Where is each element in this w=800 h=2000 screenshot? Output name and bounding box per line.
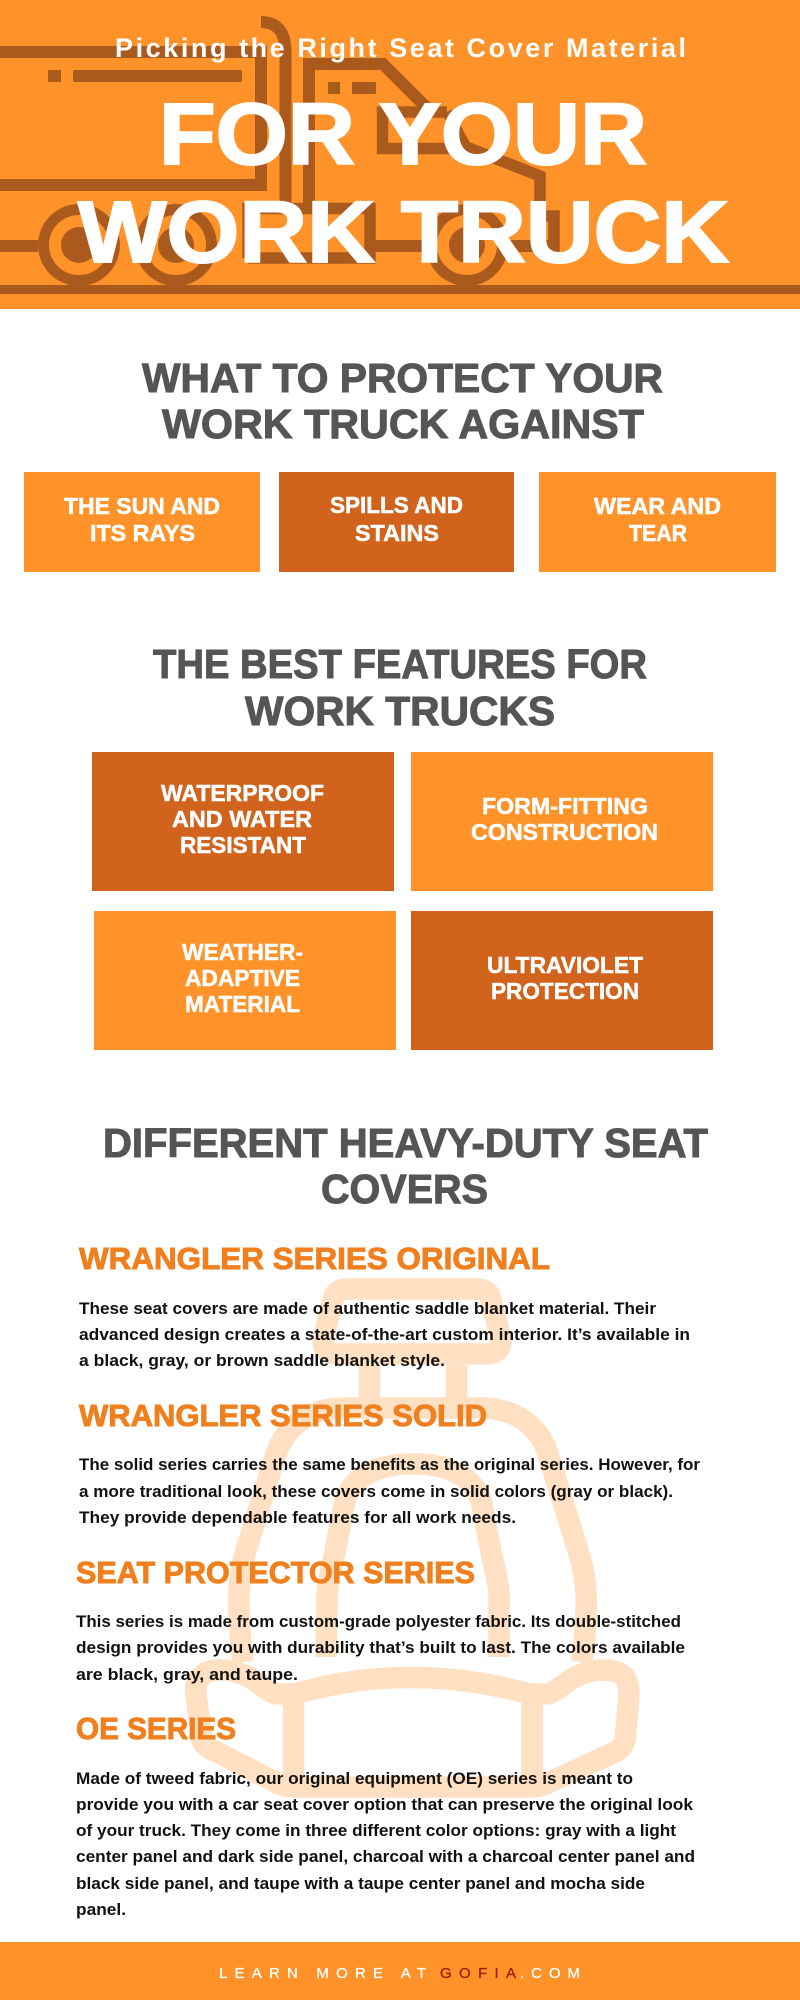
icon: truck outline <box>0 22 800 294</box>
section body <box>76 1612 685 1684</box>
card: the sun and its rays <box>24 472 260 572</box>
section body: They provide dependable features for all work needs. <box>79 1508 516 1527</box>
section body: advanced design creates a state-of-the-art custom interior. It’s available in <box>79 1325 690 1344</box>
card: spills and stains: STAINS <box>355 520 439 546</box>
icon: car seat watermark <box>196 1289 629 1790</box>
card: weather-adaptive: WEATHER- <box>182 939 303 965</box>
card: waterproof: RESISTANT <box>180 832 306 858</box>
card: the sun and its rays: THE SUN AND <box>64 493 220 519</box>
title: FOR YOUR <box>159 86 647 183</box>
card: spills and stains: SPILLS AND <box>330 492 463 518</box>
heading: seat covers: COVERS <box>321 1166 488 1212</box>
card: form-fitting: CONSTRUCTION <box>471 819 658 845</box>
section body: a more traditional look, these covers come in solid colors (gray or black). <box>79 1482 673 1501</box>
section body: The solid series carries the same benefits as the original series. However, for <box>79 1455 700 1474</box>
footer bar: LEARN MORE AT <box>219 1965 426 1982</box>
heading: what to protect: WORK TRUCK AGAINST <box>162 401 644 447</box>
heading: best features: WORK TRUCKS <box>245 688 555 734</box>
footer bar: .COM <box>520 1965 580 1982</box>
card: wear and tear <box>539 472 776 572</box>
heading: best features <box>153 641 647 734</box>
section body: These seat covers are made of authentic saddle blanket material. Their <box>79 1299 656 1318</box>
card: waterproof: WATERPROOF <box>161 780 324 806</box>
section: seat protector series <box>76 1555 685 1684</box>
section body: design provides you with durability that’s built to last. The colors available <box>76 1638 685 1657</box>
section body: panel. <box>76 1900 126 1919</box>
section heading: OE SERIES <box>76 1711 236 1746</box>
heading: what to protect: WHAT TO PROTECT YOUR <box>142 355 663 401</box>
card: waterproof <box>92 752 394 891</box>
title <box>78 86 729 281</box>
panel: features grid <box>92 752 713 1050</box>
section body: a black, gray, or brown saddle blanket style. <box>79 1351 445 1370</box>
panel: header banner <box>0 0 800 309</box>
section body: Made of tweed fabric, our original equipment (OE) series is meant to <box>76 1769 633 1788</box>
section body: of your truck. They come in three different color options: gray with a light <box>76 1821 676 1840</box>
card: spills and stains <box>279 472 514 572</box>
section body <box>79 1455 700 1527</box>
heading: best features: THE BEST FEATURES FOR <box>153 641 647 687</box>
card: weather-adaptive: MATERIAL <box>185 991 300 1017</box>
footer bar: GOFIA <box>440 1965 516 1982</box>
section body: This series is made from custom-grade polyester fabric. Its double-stitched <box>76 1612 681 1631</box>
section heading: WRANGLER SERIES ORIGINAL <box>79 1241 550 1276</box>
section body: center panel and dark side panel, charcoal with a charcoal center panel and <box>76 1847 695 1866</box>
card: form-fitting <box>411 752 713 891</box>
section body: black side panel, and taupe with a taupe center panel and mocha side <box>76 1874 645 1893</box>
section body <box>76 1769 695 1919</box>
card: weather-adaptive: ADAPTIVE <box>185 965 300 991</box>
section body: are black, gray, and taupe. <box>76 1665 298 1684</box>
card: ultraviolet <box>411 911 713 1050</box>
subtitle: Picking the Right Seat Cover Material <box>115 33 686 63</box>
card: weather-adaptive <box>94 911 396 1050</box>
card: wear and tear: TEAR <box>629 520 687 546</box>
card: ultraviolet: PROTECTION <box>491 978 639 1004</box>
card: form-fitting: FORM-FITTING <box>482 793 648 819</box>
section heading: SEAT PROTECTOR SERIES <box>76 1555 475 1590</box>
section: wrangler series solid <box>79 1398 700 1527</box>
heading: seat covers <box>103 1120 708 1212</box>
footer bar <box>0 1942 800 2000</box>
card: ultraviolet: ULTRAVIOLET <box>487 952 643 978</box>
section body <box>79 1299 690 1370</box>
section: wrangler series original <box>79 1241 690 1370</box>
heading: what to protect <box>142 355 663 447</box>
section: oe series <box>76 1711 695 1919</box>
panel: threats row <box>24 472 776 572</box>
section heading: WRANGLER SERIES SOLID <box>79 1398 487 1433</box>
card: waterproof: AND WATER <box>172 806 312 832</box>
section body: provide you with a car seat cover option that can preserve the original look <box>76 1795 694 1814</box>
title: WORK TRUCK <box>78 184 729 281</box>
card: wear and tear: WEAR AND <box>594 493 721 519</box>
card: the sun and its rays: ITS RAYS <box>90 520 195 546</box>
heading: seat covers: DIFFERENT HEAVY-DUTY SEAT <box>103 1120 708 1166</box>
